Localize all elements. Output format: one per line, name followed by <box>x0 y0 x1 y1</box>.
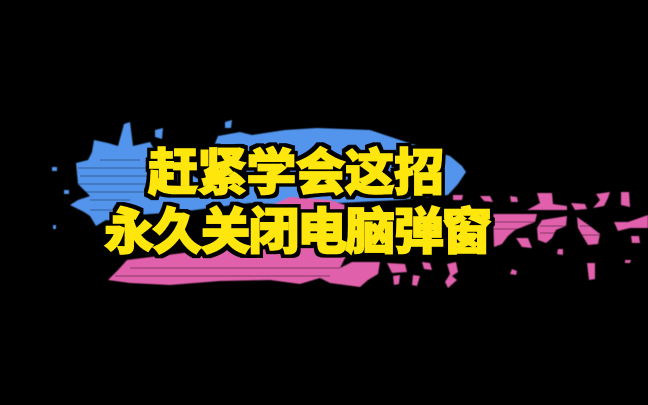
title line 1: 赶紧学会这招 <box>148 145 444 201</box>
blue stroke streaks <box>78 160 170 210</box>
title line 2: 永久关闭电脑弹窗 <box>104 204 492 260</box>
pink paint brush stroke <box>108 192 648 288</box>
title <box>104 145 492 260</box>
blue paint brush stroke <box>52 120 466 229</box>
pink stroke streaks <box>115 222 600 276</box>
